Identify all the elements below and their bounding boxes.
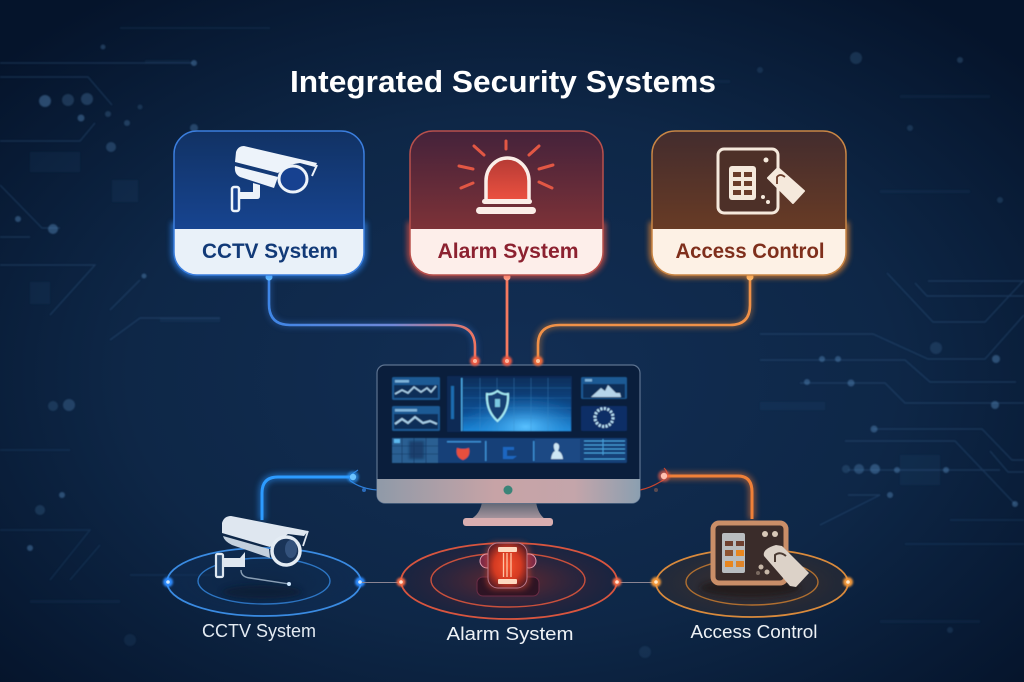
- link between floor devices: [362, 582, 655, 584]
- device: access control on floor: [651, 523, 853, 642]
- icon: keypad and key card: [713, 523, 809, 587]
- monitor: [377, 365, 640, 526]
- panel: alarm system card: [410, 131, 603, 275]
- label: CCTV system: CCTV System: [202, 240, 338, 263]
- label: access control: Access Control: [690, 622, 818, 642]
- icon: shield: [487, 391, 508, 421]
- icon: keypad and key card: [718, 149, 804, 213]
- monitor dashboard screen: [392, 376, 627, 463]
- label: CCTV system: CCTV System: [202, 621, 316, 641]
- icon: alarm beacon: [459, 141, 553, 214]
- device: alarm system on floor: [396, 542, 622, 644]
- connector nodes at monitor top: [470, 356, 543, 366]
- label: alarm system: Alarm System: [438, 240, 578, 263]
- device: CCTV system on floor: [163, 516, 365, 641]
- icon: alarm device: [477, 542, 539, 596]
- title: Integrated Security Systems: [290, 64, 716, 99]
- icon: CCTV camera: [232, 146, 317, 211]
- panel: CCTV system card: [174, 131, 364, 275]
- panel: access control card: [652, 131, 846, 275]
- connector lines: monitor to floor devices: [262, 468, 752, 520]
- connector lines: top cards to monitor: [266, 274, 754, 361]
- label: access control: Access Control: [676, 240, 824, 263]
- icon: CCTV camera: [216, 516, 308, 586]
- label: alarm system: Alarm System: [446, 624, 574, 644]
